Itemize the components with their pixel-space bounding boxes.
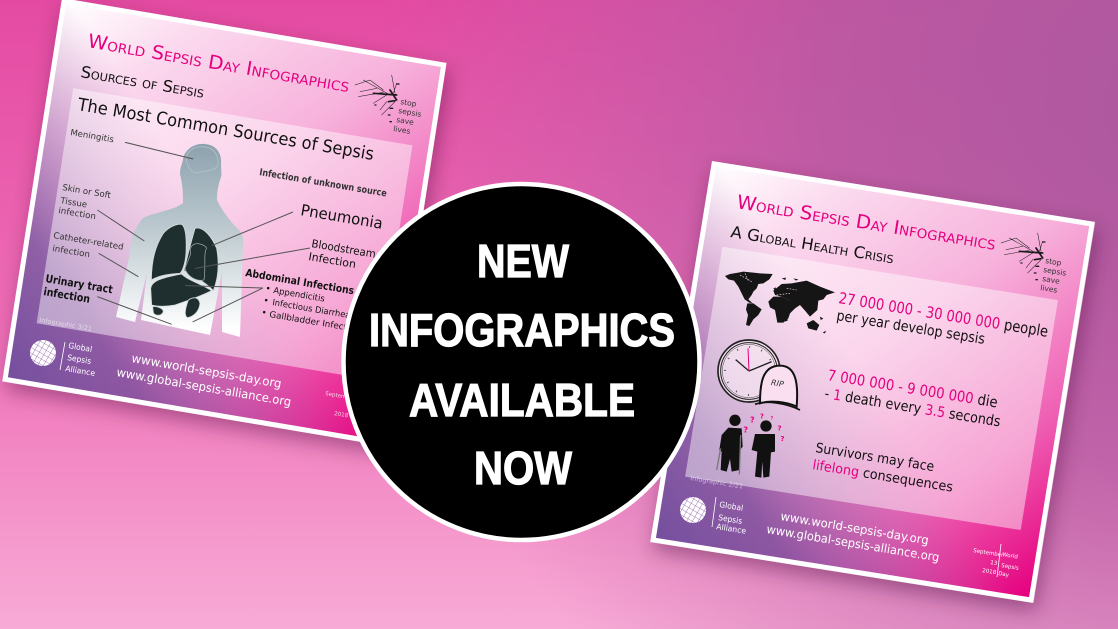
subtitle: Sources of Sepsis [79, 62, 206, 102]
infographic number: Infographic 3/21 [39, 316, 93, 333]
labels: body sources: Bloodstream [310, 237, 377, 261]
labels: body sources: • [264, 284, 271, 295]
icon: stop sepsis splatter logo: stop [1045, 256, 1062, 268]
labels: body sources: infection [57, 206, 97, 222]
statistic: survivors: lifelong consequences [811, 457, 954, 496]
logo: global sepsis alliance [680, 497, 747, 536]
statistic: people developing sepsis: per year develop sepsis [835, 308, 986, 348]
labels: body sources: Infection [307, 250, 357, 271]
date: 2018 [334, 411, 349, 419]
logo: global sepsis alliance: Sepsis [67, 353, 92, 366]
labels: body sources: Infection of unknown source [258, 167, 388, 199]
icon: survivors with question marks: ? [777, 424, 782, 433]
website links: www.global-sepsis-alliance.org [766, 522, 940, 565]
icon: clock and gravestone [718, 340, 800, 410]
date block: 13 [990, 560, 998, 567]
infographic number: Infographic 2/21 [690, 474, 744, 491]
labels: body sources: Meningitis [69, 128, 115, 145]
labels: body sources: Catheter-related [52, 231, 124, 253]
callout: new infographics available now [344, 184, 700, 540]
logo: global sepsis alliance: Alliance [716, 522, 747, 536]
icon: survivors with question marks: ? [760, 412, 764, 420]
callout: new infographics available now: AVAILABLE [409, 374, 635, 426]
logo: global sepsis alliance: Global [68, 341, 93, 354]
date block: Day [998, 571, 1010, 579]
website links: www.global-sepsis-alliance.org [115, 365, 292, 409]
logo: global sepsis alliance: Sepsis [718, 513, 743, 526]
figure: human body with organs [116, 144, 243, 337]
website links: www.world-sepsis-day.org [130, 351, 283, 391]
callout: new infographics available now: NEW [477, 235, 569, 287]
statistic: deaths: - 1 death every 3.5 seconds [823, 386, 1002, 430]
labels: body sources: Gallbladder Infection [268, 310, 361, 335]
labels: body sources: • [260, 308, 267, 319]
icon: stop sepsis splatter logo: sepsis [398, 106, 422, 119]
icon: survivors with question marks [717, 412, 785, 478]
icon: survivors with question marks: ? [780, 434, 785, 443]
date block: September [973, 548, 1004, 559]
panel: global health crisis card [650, 161, 1095, 603]
statistic: people developing sepsis: 27 000 000 - 30 000 000 people [837, 289, 1050, 341]
icon: clock and gravestone: RIP [770, 378, 784, 389]
icon: stop sepsis splatter logo: sepsis [1043, 265, 1067, 278]
date [325, 391, 356, 419]
statistic: deaths [823, 366, 1002, 430]
statistic: survivors: Survivors may face [814, 440, 935, 475]
title: World Sepsis Day Infographics [735, 191, 997, 255]
date: September [325, 391, 356, 402]
date block [973, 544, 1019, 579]
date block: 2018 [982, 568, 997, 576]
panel: sources of sepsis card [2, 0, 447, 446]
logo: global sepsis alliance [30, 340, 96, 378]
statistic: survivors [811, 440, 954, 496]
icon: survivors with question marks: ? [743, 425, 748, 434]
label lines [97, 142, 310, 324]
callout: new infographics available now: INFOGRAPHICS [369, 304, 675, 356]
card sheet [650, 161, 1095, 603]
icon: stop sepsis splatter logo: save [396, 115, 415, 127]
icon: stop sepsis splatter logo: stop [400, 97, 417, 109]
heading: most common sources: The Most Common Sources of Sepsis [75, 95, 375, 165]
card sheet [2, 0, 447, 446]
icon: survivors with question marks: ? [750, 415, 755, 424]
labels: body sources [42, 128, 388, 335]
labels: body sources: • [262, 296, 269, 307]
icon: stop sepsis splatter logo [1001, 233, 1067, 295]
icon: stop sepsis splatter logo: save [1042, 274, 1061, 286]
icon: world map [725, 272, 835, 333]
labels: body sources: Appendicitis [272, 286, 326, 305]
labels: body sources: Tissue [59, 196, 88, 210]
labels: body sources: Urinary tract [44, 272, 114, 296]
date block: World [1002, 552, 1018, 560]
logo: global sepsis alliance: Global [719, 500, 744, 513]
subtitle: A Global Health Crisis [729, 222, 895, 267]
labels: body sources: infection [51, 244, 91, 260]
icon: stop sepsis splatter logo: lives [393, 124, 411, 136]
title: World Sepsis Day Infographics [86, 30, 351, 97]
labels: body sources: infection [42, 285, 91, 306]
website links: www.world-sepsis-day.org [780, 509, 930, 547]
callout: new infographics available now: NOW [474, 442, 573, 494]
labels: body sources: Skin or Soft [61, 183, 112, 201]
date block: Sepsis [1001, 563, 1019, 572]
labels: body sources: Infectious Diarrhea [271, 298, 351, 321]
icon: stop sepsis splatter logo: lives [1040, 283, 1058, 295]
icon: stop sepsis splatter logo [355, 75, 422, 136]
icon: survivors with question marks: ? [771, 416, 774, 422]
logo: global sepsis alliance: Alliance [65, 364, 96, 378]
labels: body sources: Pneumonia [299, 201, 384, 233]
labels: body sources: Abdominal Infections [244, 267, 355, 297]
statistic: deaths: 7 000 000 - 9 000 000 die [826, 366, 999, 411]
